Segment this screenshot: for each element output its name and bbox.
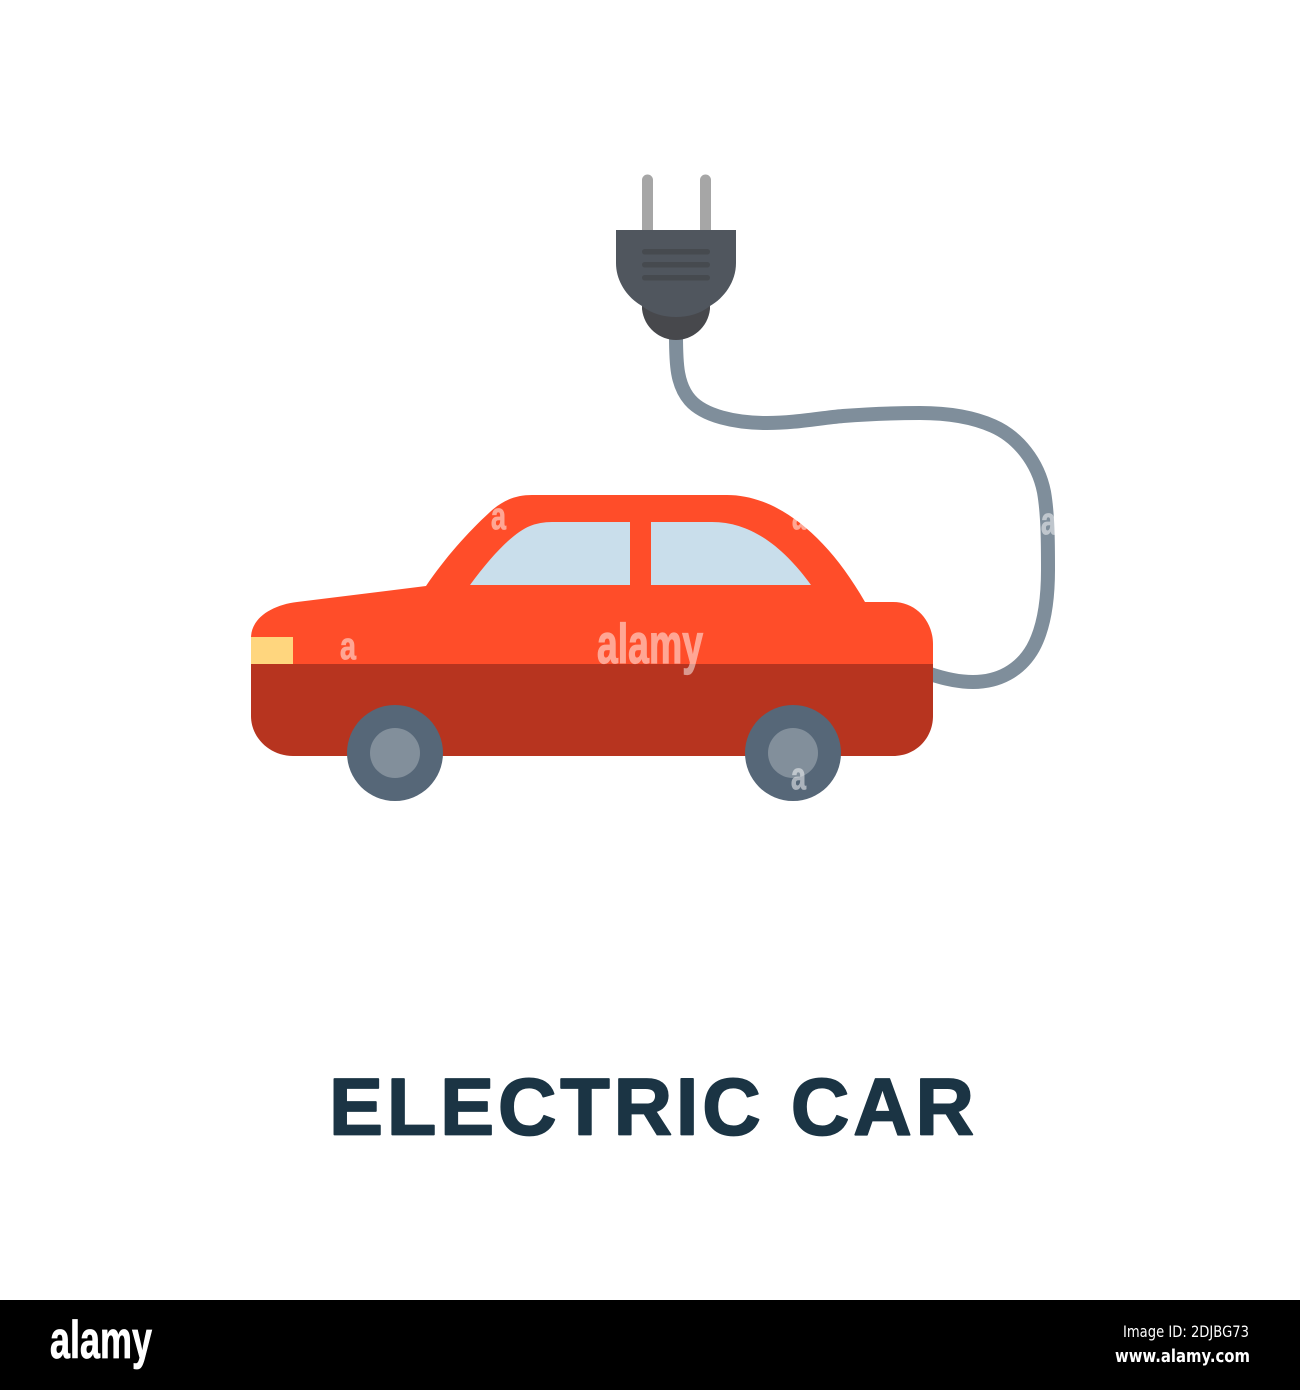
headlight bbox=[251, 637, 293, 664]
footer logo: alamy bbox=[50, 1311, 152, 1370]
website: www.alamy.com bbox=[1115, 1347, 1250, 1367]
watermark: small a marks: a bbox=[791, 756, 807, 798]
watermark: small a marks: a bbox=[792, 496, 807, 538]
watermark: small a marks: a bbox=[1041, 501, 1057, 543]
title: ELECTRIC CAR bbox=[329, 1062, 974, 1152]
image id: Image ID: 2DJBG73 bbox=[1123, 1322, 1249, 1341]
front wheel bbox=[347, 705, 443, 801]
plug prong right bbox=[700, 174, 711, 231]
plug grip lines bbox=[642, 249, 710, 280]
car body lower bbox=[251, 664, 933, 756]
front window bbox=[470, 522, 630, 585]
footer bar bbox=[0, 1300, 1300, 1390]
charging cord bbox=[676, 335, 1048, 682]
rear wheel bbox=[745, 705, 841, 801]
watermark: alamy center: alamy bbox=[597, 612, 703, 675]
plug neck bbox=[642, 300, 710, 340]
watermark: small a marks bbox=[340, 496, 1057, 798]
plug bbox=[616, 174, 736, 340]
plug body bbox=[616, 230, 736, 317]
car body upper bbox=[251, 495, 933, 664]
rear window bbox=[651, 522, 811, 585]
icon: electric car with plug bbox=[251, 174, 1048, 801]
watermark: small a marks: a bbox=[491, 496, 507, 538]
watermark: small a marks: a bbox=[340, 626, 357, 668]
plug prong left bbox=[642, 174, 653, 231]
